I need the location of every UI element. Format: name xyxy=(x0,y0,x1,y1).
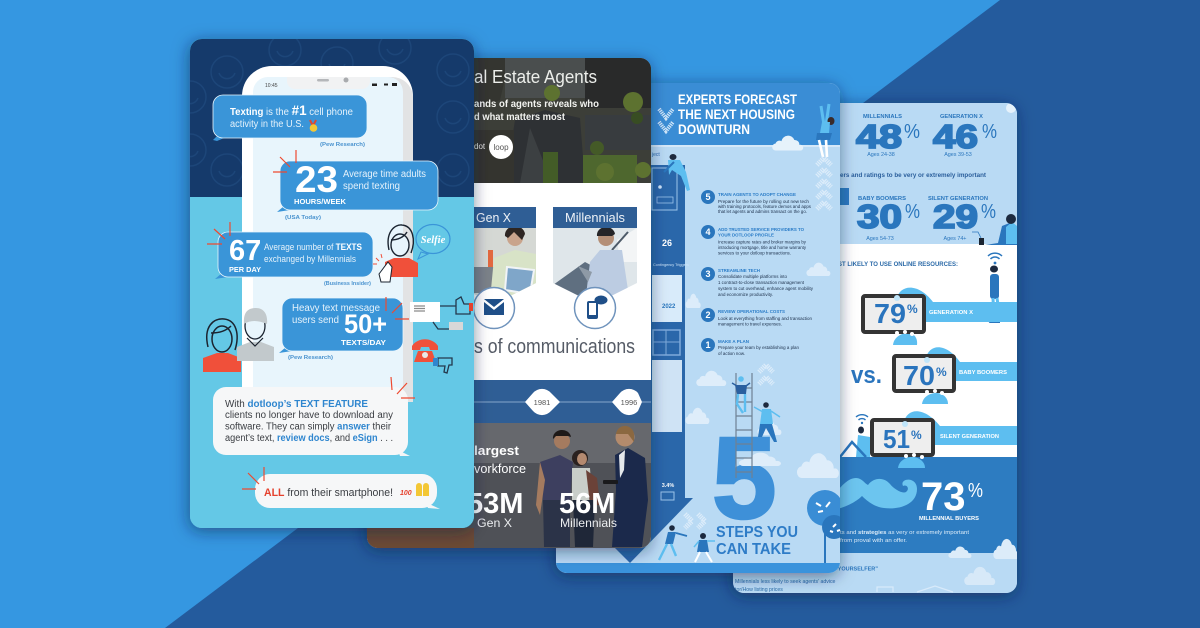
list: step 2: 2 xyxy=(705,310,711,320)
illustration: clouds behind ladder xyxy=(685,371,839,478)
dark top band with smileys xyxy=(174,32,474,197)
heading: largest workforce: largest xyxy=(474,443,520,458)
bubble: 50+ texts per day: TEXTS/DAY xyxy=(341,338,386,347)
panel: left dark column: 3.4% xyxy=(662,483,674,489)
icon: mid clouds xyxy=(686,263,830,308)
marker: 1996 xyxy=(612,389,642,415)
chart: baby boomers tablet 70% xyxy=(894,347,1017,404)
figure: man xyxy=(536,430,573,547)
icon: person on ladder xyxy=(732,376,750,413)
panel: Gen X xyxy=(452,207,536,328)
bubble: dotloop text feature: agent’s text, review docs, and eSign . . . xyxy=(225,433,393,444)
chart: generation x tablet 79%: 79 xyxy=(874,298,906,329)
bubble: 23 hours per week: spend texting xyxy=(343,181,400,192)
panel: infographic card 3 experts forecast downturn xyxy=(556,83,846,573)
header band xyxy=(651,83,840,145)
heading: online resources: ST LIKELY TO USE ONLINE RESOURCES: xyxy=(838,262,958,268)
stat: millennials 48%: 48 xyxy=(856,118,902,155)
icon: selfie speech bubble: Selfie xyxy=(421,235,446,246)
icons: red spark marks xyxy=(207,150,415,489)
band: birth years timeline xyxy=(367,380,651,423)
icon: trees xyxy=(807,490,846,563)
logo: dotloop: loop xyxy=(493,143,509,152)
chart: baby boomers tablet 70%: BABY BOOMERS xyxy=(959,370,1007,376)
chart: generation x tablet 79% xyxy=(863,288,1017,345)
icon: person climbing over column xyxy=(664,154,690,191)
bubble: all from their smartphone xyxy=(255,474,440,509)
big number 5: 5 xyxy=(712,413,777,543)
icon: woman jumping xyxy=(816,104,834,157)
chart: baby boomers tablet 70%: % xyxy=(936,365,947,379)
stat: millennials 48%: MILLENNIALS xyxy=(863,114,902,120)
icon: selfie speech bubble xyxy=(416,224,450,259)
text: vs: vs. xyxy=(851,362,882,389)
list: step 3: STREAMLINE TECH xyxy=(718,268,760,274)
heading: largest workforce xyxy=(474,443,526,476)
list: step 4: introducing mortgage, title and home warranty xyxy=(718,245,807,250)
chart: generation x tablet 79%: % xyxy=(907,302,918,316)
panel: infographic card 4 generations online resources xyxy=(733,103,1019,593)
title: EXPERTS FORECAST xyxy=(678,92,798,107)
logo: dotloop xyxy=(474,135,513,159)
stat: silent generation 29%: Ages 74+ xyxy=(944,236,966,242)
title xyxy=(678,94,797,134)
bubble: all from their smartphone: ALL from their smartphone! xyxy=(264,487,393,499)
stat: generation x 46%: Ages 39-53 xyxy=(944,152,972,158)
bubble: dotloop text feature: With dotloop’s TEXT FEATURE xyxy=(225,399,368,410)
icon: person standing on 5 xyxy=(754,402,780,442)
chart: silent generation tablet 51%: % xyxy=(911,428,922,442)
stat: millennials 48%: Ages 24-38 xyxy=(867,152,895,158)
panel: left dark column: ject xyxy=(651,152,660,158)
list: step 3: Consolidate multiple platforms into xyxy=(718,274,787,279)
list: step 3: and economize productivity. xyxy=(718,292,773,297)
icons: house outlines xyxy=(877,586,953,592)
heading: largest workforce: vorkforce xyxy=(474,462,526,476)
icon: medal xyxy=(310,120,317,132)
list: step 3: 1 contract-to-close transaction management xyxy=(718,280,805,285)
list: step 5 xyxy=(701,190,812,214)
heading: communications: s of communications xyxy=(474,336,635,358)
chart: generation x tablet 79%: GENERATION X xyxy=(929,310,973,316)
list: step 2: REVIEW OPERATIONAL COSTS xyxy=(718,309,786,315)
icon: message and thumbs up xyxy=(410,297,473,330)
bubble: 50+ texts per day: users send xyxy=(292,315,339,326)
illustration: smartphone: 10:45 xyxy=(265,83,278,89)
icon: chevron column xyxy=(817,158,831,209)
figure: woman xyxy=(572,450,600,547)
grass and bottom strip xyxy=(556,563,840,573)
list: step 1: Prepare your team by establishing a plan xyxy=(718,345,799,350)
photo: aerial neighbourhood xyxy=(367,58,651,183)
stat: 73% millennial buyers: 73 xyxy=(921,475,966,519)
list: step 5: 5 xyxy=(705,192,711,202)
stat: generation x 46%: % xyxy=(982,121,997,143)
list: step 4: services to your dotloop transactions. xyxy=(718,250,791,255)
list: step 1: of action now. xyxy=(718,351,745,356)
list: step 3 xyxy=(701,267,814,297)
list: step 4: 4 xyxy=(705,227,711,237)
bubble: 50+ texts per day: Heavy text message xyxy=(292,303,380,314)
logo: dotloop: dot xyxy=(474,142,486,151)
bubble: 67 per day: exchanged by Millennials xyxy=(264,254,356,264)
stat: baby boomers 30% xyxy=(857,196,920,242)
subtitle: ands of agents reveals who xyxy=(474,99,599,110)
badge: partial stat xyxy=(840,188,849,205)
text: strategies note: ts and strategies as very or extremely important xyxy=(840,530,970,536)
bubble: 50+ texts per day: 50+ xyxy=(344,309,387,339)
panel: left dark column: 2022 xyxy=(662,304,676,310)
bubble: 67 per day: PER DAY xyxy=(229,265,261,274)
text: ratings importance: ers and ratings to be very or extremely important xyxy=(840,172,986,179)
bubble: texting is #1 xyxy=(213,95,367,141)
bubble: 50+ texts per day xyxy=(279,298,403,353)
panel: left dark column xyxy=(556,147,693,563)
heading: yourselfer: “DO-IT-YOURSELFER” xyxy=(818,566,878,572)
icon: raised hands xyxy=(416,483,429,496)
icon: wifi and standing person xyxy=(985,253,1002,322)
text: strategies note xyxy=(840,530,970,544)
list: step 1: 1 xyxy=(705,340,711,350)
marker: 1981: 1981 xyxy=(534,398,550,407)
icon: header cloud xyxy=(772,136,803,151)
icon: moustache xyxy=(840,478,917,508)
list: step 3: system to cut overhead, enhance agent mobility xyxy=(718,286,814,291)
source: pew research: (Pew Research) xyxy=(320,142,365,148)
icon: runner woman xyxy=(694,533,715,562)
subtitle: d what matters most xyxy=(474,112,566,123)
title: DOWNTURN xyxy=(678,122,750,137)
stat: generation x 46%: 46 xyxy=(933,118,978,155)
stat: generation x 46% xyxy=(933,114,997,158)
icon: 100 emoji: 100 xyxy=(400,490,412,497)
bubble: 23 hours per week xyxy=(277,159,438,212)
stat: generation x 46%: GENERATION X xyxy=(940,114,983,120)
icon: chevrons up xyxy=(759,365,773,384)
icon: envelope xyxy=(484,299,504,315)
bubble: 67 per day: Average number of TEXTS xyxy=(264,242,362,252)
icon: woman with smartphone xyxy=(373,225,418,282)
text: steps you can take: STEPS YOU xyxy=(716,524,798,541)
bubble: 23 hours per week: HOURS/WEEK xyxy=(294,197,347,206)
bubble: dotloop text feature: clients no longer have to download any xyxy=(225,410,393,421)
list: step 5: Prepare for the future by rolling out new tech xyxy=(718,199,809,204)
icon: phone with speech bubble xyxy=(587,296,608,319)
list: step 3: 3 xyxy=(705,269,711,279)
stat: baby boomers 30%: 30 xyxy=(857,198,902,235)
panel: infographic card 1 texting statistics xyxy=(174,32,474,528)
stat: silent generation 29%: SILENT GENERATION xyxy=(928,196,988,202)
chart: silent generation tablet 51%: 51 xyxy=(883,424,910,454)
source: business insider: (Business Insider) xyxy=(324,281,371,287)
bubble: 23 hours per week: 23 xyxy=(295,159,338,200)
text: advice: tor/How listing prices xyxy=(735,587,783,593)
stat: 73% millennial buyers: % xyxy=(968,480,983,502)
stat: baby boomers 30%: BABY BOOMERS xyxy=(858,196,906,202)
text: steps you can take xyxy=(716,524,798,558)
stat: silent generation 29%: 29 xyxy=(933,198,978,235)
list: step 1: MAKE A PLAN xyxy=(718,339,749,345)
text: steps you can take: CAN TAKE xyxy=(716,541,791,558)
list: step 4: ADD TRUSTED SERVICE PROVIDERS TO xyxy=(718,227,804,233)
clouds: bottom xyxy=(948,539,1019,585)
stat: millennials 48% xyxy=(856,114,920,158)
stat: millennials 48%: % xyxy=(904,121,920,143)
bubble: dotloop text feature xyxy=(213,387,410,456)
list: step 4: Increase capture rates and broker margins by xyxy=(718,239,807,244)
stat: 73% millennial buyers: MILLENNIAL BUYERS xyxy=(919,516,979,522)
stat: 56M Millennials: Millennials xyxy=(560,516,617,530)
bubble: dotloop text feature: software. They can simply answer their xyxy=(225,422,392,432)
icon: grey man xyxy=(237,308,274,361)
list: step 5: that let agents and admins transact on the go. xyxy=(718,209,807,214)
icon: thumbs down xyxy=(433,358,452,373)
stat: silent generation 29%: % xyxy=(981,201,996,223)
list: step 2 xyxy=(701,308,812,327)
marker: 1981 xyxy=(525,389,560,415)
stat: baby boomers 30%: % xyxy=(905,201,920,223)
source: pew research: (Pew Research) xyxy=(288,355,333,361)
bubble: texting is #1: Texting is the #1 cell phone xyxy=(230,102,353,118)
icon: red woman xyxy=(203,319,241,372)
list: step 1 xyxy=(701,338,799,356)
chart: silent generation tablet 51%: SILENT GENERATION xyxy=(940,434,999,440)
list: step 4 xyxy=(701,225,807,255)
text: advice xyxy=(735,579,836,593)
bubble: texting is #1: activity in the U.S. xyxy=(230,119,304,130)
source: usa today: (USA Today) xyxy=(285,215,321,221)
stat: 56M Millennials: 56M xyxy=(559,488,615,520)
figure: agent xyxy=(603,426,648,547)
list: step 5: with training protocols, feature demos and apps xyxy=(718,204,812,209)
icon: runner man xyxy=(659,525,687,560)
bubble: 23 hours per week: Average time adults xyxy=(343,169,426,180)
bubble: 67 per day xyxy=(215,232,373,279)
icon: header chevrons xyxy=(659,109,673,131)
stat: 53M Gen X: 53M xyxy=(467,488,523,520)
photo: agent with couple xyxy=(367,423,651,548)
icon: chevrons right xyxy=(685,514,705,528)
icon: woman sitting with laptop xyxy=(972,214,1017,245)
panel: infographic card 2 real estate agents xyxy=(367,58,651,548)
text: advice: Millennials less likely to seek agents’ advice xyxy=(735,579,836,585)
list: step 2: Look at everything from staffing and transaction xyxy=(718,316,812,321)
chart: baby boomers tablet 70%: 70 xyxy=(903,360,935,391)
icon: ladder xyxy=(736,373,752,478)
stat: 73% millennial buyers xyxy=(919,482,982,520)
marker: 1996: 1996 xyxy=(621,398,637,407)
stat: silent generation 29% xyxy=(928,196,996,242)
title: THE NEXT HOUSING xyxy=(678,107,795,122)
bubble: 67 per day: 67 xyxy=(229,235,261,267)
list: step 5: TRAIN AGENTS TO ADOPT CHANGE xyxy=(718,192,797,198)
illustration: smartphone xyxy=(242,66,413,402)
icon: cloud over 5 xyxy=(739,453,781,466)
icon: red telephone xyxy=(412,339,438,362)
subtitle xyxy=(474,99,599,123)
stat: baby boomers 30%: Ages 54-73 xyxy=(866,236,894,242)
list: step 2: management to travel expenses. xyxy=(718,322,782,327)
text: strategies note: from proval with an offer. xyxy=(840,538,907,544)
panel: Gen X: Gen X xyxy=(476,210,511,225)
stat: 53M Gen X: Gen X xyxy=(477,516,512,530)
panel: Millennials: Millennials xyxy=(565,210,625,225)
list: step 4: YOUR DOTLOOP PROFILE xyxy=(718,233,775,239)
panel: left dark column: Contingency Triggers xyxy=(653,263,689,267)
title: al Estate Agents xyxy=(474,66,597,87)
panel: Millennials xyxy=(553,207,637,328)
panel: left dark column: 26 xyxy=(662,238,672,248)
chart: silent generation tablet 51% xyxy=(872,411,1017,468)
icon: wifi and sitting person xyxy=(840,415,870,457)
